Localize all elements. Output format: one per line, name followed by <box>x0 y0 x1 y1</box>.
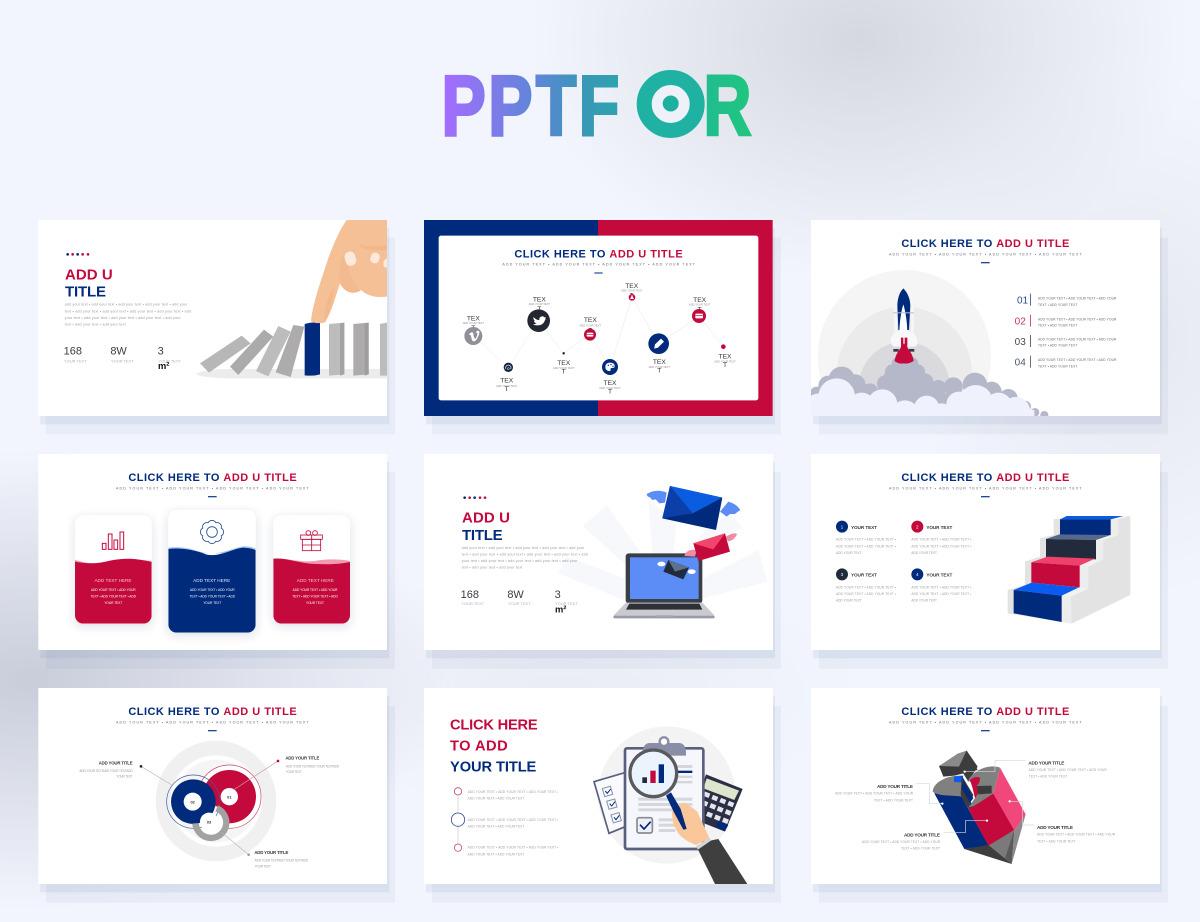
callout: top right: ADD YOUR TEXT • ADD YOUR TEXT • ADD YOUR <box>1029 768 1107 772</box>
numbered list: ADD YOUR TEXT • ADD YOUR TEXT • ADD YOUR <box>1038 337 1117 341</box>
statistics: 168 <box>64 345 82 357</box>
callout: right: YOUR TEXT <box>286 770 302 774</box>
clipboard illustration <box>594 726 747 884</box>
step 3 text <box>836 568 896 603</box>
callout: top right: TEXT • ADD YOUR TEXT <box>1029 775 1067 779</box>
callout: right <box>1008 800 1116 843</box>
body text: text • add your text • add your text <box>65 323 126 327</box>
node labels: TEX <box>604 380 617 387</box>
node labels: ADD YOUR TEXT <box>599 386 621 390</box>
heading: TO ADD <box>450 739 508 755</box>
callout: right: ADD YOUR TEXTADD YOUR TEXTADD <box>286 764 340 768</box>
node labels: T <box>505 386 509 393</box>
statistics: 3 <box>555 589 561 601</box>
title: CLICK HERE TO ADD U TITLE <box>901 472 1069 484</box>
step 4 text: ADD YOUR TEXT • ADD YOUR TEXT • <box>911 592 971 596</box>
statistics: YOUR TEXT <box>64 358 87 363</box>
step 1 text: ADD YOUR TEXT • ADD YOUR TEXT • <box>836 544 896 548</box>
card: right <box>273 515 350 624</box>
node labels: T <box>562 369 566 376</box>
node labels: T <box>608 389 612 396</box>
statistics: 168 <box>461 589 479 601</box>
timeline list: ADD YOUR TEXT • ADD YOUR TEXT • ADD YOUR TEXT • <box>468 818 558 822</box>
logo: PPTFOR: PPTFOR <box>441 59 751 154</box>
node labels: TEX <box>693 297 707 304</box>
numbered list: 03 <box>1015 337 1026 348</box>
callout: right <box>233 756 340 790</box>
heading: TITLE <box>65 284 106 301</box>
callout: left <box>835 784 943 805</box>
venn circles <box>156 741 276 861</box>
panel: clipboard slide <box>424 688 781 903</box>
step 4 text: ADD YOUR TEXT • ADD YOUR TEXT • <box>911 585 971 589</box>
numbered list: 02 <box>1015 317 1026 328</box>
numbered list: TEXT • ADD YOUR TEXT <box>1038 344 1077 348</box>
panel: stairs slide <box>811 454 1168 669</box>
step 1 text: 1 <box>841 524 844 529</box>
card: right: TEXT • ADD YOUR TEXT • ADD <box>292 594 338 598</box>
callout: top right: ADD YOUR TITLE <box>1028 761 1064 766</box>
connecting line <box>473 297 723 367</box>
icon: signal node <box>504 363 513 372</box>
step 1 text: ADD YOUR TEXT • ADD YOUR TEXT • <box>836 538 896 542</box>
card: centre: ADD YOUR TEXT • ADD YOUR <box>190 588 235 592</box>
node labels <box>463 283 736 396</box>
callout: bottom <box>222 833 309 868</box>
panel: domino slide <box>38 220 395 434</box>
node labels: T <box>698 306 702 313</box>
big blue envelope <box>647 486 740 530</box>
body text: add your text • add your text • add your text • add your text • add your <box>462 546 585 550</box>
statistics: YOUR TEXT <box>158 358 182 363</box>
timeline list <box>451 788 558 856</box>
statistics <box>64 345 182 371</box>
rocket <box>891 288 917 364</box>
icon: gear <box>200 520 224 544</box>
body text: your text • add your text • add your text • add your text • add your <box>462 559 578 563</box>
icon: flask node <box>629 294 635 301</box>
icon: archive node <box>692 309 706 323</box>
step 4 text: 4 <box>916 572 919 577</box>
icon: vimeo node <box>464 327 482 345</box>
node labels: ADD YOUR TEXT <box>621 289 643 293</box>
step 4 text <box>911 568 971 603</box>
side checklist <box>593 772 624 834</box>
heading <box>450 718 538 776</box>
venn circles: 03 <box>207 819 212 824</box>
callout: lower left: TEXT • ADD YOUR TEXT <box>901 847 940 851</box>
callout: right: ADD YOUR TEXT • ADD YOUR TEXT • ADD YOUR <box>1037 833 1116 837</box>
numbered list: ADD YOUR TEXT • ADD YOUR TEXT • ADD YOUR <box>1038 296 1117 300</box>
step 2 text: ADD YOUR TEXT • ADD YOUR TEXT • <box>911 544 971 548</box>
3D cut block <box>933 751 1026 864</box>
front smoke cloud <box>811 378 1034 416</box>
node labels: T <box>537 306 541 313</box>
venn circles: 02 <box>190 799 196 804</box>
card: centre: TEXT • ADD YOUR TEXT • ADD <box>190 594 236 598</box>
statistics: 8W <box>507 589 524 601</box>
step 3 text: YOUR TEXT <box>851 573 877 578</box>
step 1 text <box>836 521 896 555</box>
decorative dots <box>463 496 486 499</box>
title: CLICK HERE TO ADD U TITLE <box>901 706 1069 718</box>
panel: 3D block slide <box>811 688 1168 903</box>
node labels: ADD YOUR TEXT <box>496 384 518 388</box>
callout: bottom: ADD YOUR TEXTADD YOUR TEXTADD <box>255 859 309 863</box>
node labels: T <box>630 293 634 300</box>
node labels: T <box>657 368 661 375</box>
callout: left: YOUR TEXT <box>116 775 133 779</box>
subtitle: ADD YOUR TEXT • ADD YOUR TEXT • ADD YOUR TEXT • ADD YOUR TEXT <box>116 720 309 724</box>
statistics: m² <box>555 604 566 614</box>
node labels: TEX <box>533 296 546 303</box>
step 3 text: ADD YOUR TEXT • ADD YOUR TEXT • <box>836 585 896 589</box>
body text <box>462 546 588 570</box>
node labels: TEX <box>719 354 732 361</box>
icon: gift <box>301 531 322 551</box>
subtitle: ADD YOUR TEXT • ADD YOUR TEXT • ADD YOUR TEXT • ADD YOUR TEXT <box>889 720 1082 724</box>
callout: left: ADD YOUR TITLE <box>877 784 913 789</box>
title: CLICK HERE TO ADD U TITLE <box>514 249 683 261</box>
numbered list: TEXT • ADD YOUR TEXT <box>1038 365 1077 369</box>
numbered list <box>1015 294 1117 369</box>
card: left: YOUR TEXT <box>104 601 122 605</box>
body text: text • add your text • add your text <box>462 566 522 570</box>
node labels: TEX <box>653 359 666 366</box>
rocket launch illustration <box>811 270 1048 416</box>
callout: right: TEXT • ADD YOUR TEXT <box>1037 839 1076 843</box>
numbered list: TEXT • ADD YOUR TEXT <box>1038 324 1077 328</box>
step 3 text: ADD YOUR TEXT • ADD YOUR TEXT • <box>836 592 896 596</box>
numbered list: ADD YOUR TEXT • ADD YOUR TEXT • ADD YOUR <box>1038 317 1117 321</box>
numbered list: TEXT • ADD YOUR TEXT <box>1038 303 1077 307</box>
3D stairs <box>1008 516 1130 624</box>
node labels: T <box>471 325 475 332</box>
heading <box>462 510 510 544</box>
panel: three cards slide <box>38 454 395 669</box>
panel: email laptop slide <box>424 454 781 669</box>
step 2 text <box>911 521 971 555</box>
panel: circles slide <box>38 688 395 903</box>
small dark envelope <box>657 560 696 579</box>
node labels: ADD YOUR TEXT <box>649 365 670 369</box>
numbered list: 04 <box>1015 358 1026 369</box>
body text: add your text • add your text • add your text • add your text • add your <box>65 303 188 307</box>
node labels: TEX <box>500 377 514 384</box>
panel: social timeline slide <box>424 220 781 434</box>
statistics: 8W <box>110 345 127 357</box>
red envelope <box>684 533 737 561</box>
callout: left: ADD YOUR TEXTADD YOUR TEXTADD <box>79 769 133 773</box>
node labels: ADD YOUR TEXT <box>463 321 484 325</box>
card: left <box>75 515 152 624</box>
back smoke cloud <box>811 358 1048 416</box>
card: centre: YOUR TEXT <box>203 601 221 605</box>
panel: rocket slide <box>804 220 1168 443</box>
clipboard board <box>625 737 703 849</box>
card: right: YOUR TEXT <box>306 601 324 605</box>
heading: CLICK HERE <box>450 718 538 734</box>
callout: bottom: YOUR TEXT <box>255 864 271 868</box>
icon: palette node <box>602 359 618 375</box>
node labels: ADD YOUR TEXT <box>529 302 550 306</box>
step 2 text: ADD YOUR TEXT • ADD YOUR TEXT • <box>911 538 971 542</box>
callout: left: ADD YOUR TEXT • ADD YOUR TEXT • ADD YOUR <box>835 792 914 796</box>
node labels: TEX <box>467 315 480 322</box>
hand with magnifier <box>630 750 747 884</box>
body text: text • add your text • add your text • add your text • add your text • add <box>462 553 588 557</box>
subtitle: ADD YOUR TEXT • ADD YOUR TEXT • ADD YOUR TEXT • ADD YOUR TEXT <box>116 486 309 490</box>
step 1 text: YOUR TEXT <box>851 525 877 530</box>
statistics: YOUR TEXT <box>555 601 578 606</box>
card: centre: ADD TEXT HERE <box>193 578 230 583</box>
icon: card node <box>584 329 596 341</box>
step 3 text: 3 <box>841 572 844 577</box>
statistics: YOUR TEXT <box>508 601 531 606</box>
decorative dots <box>66 253 89 256</box>
title: CLICK HERE TO ADD U TITLE <box>901 238 1069 250</box>
node labels: ADD YOUR TEXT <box>714 359 736 363</box>
calculator <box>704 774 743 832</box>
step 4 text: ADD YOUR TEXT <box>911 599 937 603</box>
callout: right: ADD YOUR TITLE <box>285 756 319 761</box>
heading <box>65 266 113 301</box>
card: left: ADD TEXT HERE <box>94 578 132 583</box>
node labels: ADD YOUR TEXT <box>553 366 575 370</box>
icon: pencil node <box>648 333 669 354</box>
timeline list: ADD YOUR TEXT • ADD YOUR TEXT <box>468 825 524 829</box>
subtitle: ADD YOUR TEXT • ADD YOUR TEXT • ADD YOUR TEXT • ADD YOUR TEXT <box>889 486 1082 490</box>
node labels: TEX <box>625 283 639 290</box>
step 2 text: 2 <box>916 524 919 529</box>
icon: twitter node <box>527 309 550 332</box>
heading: ADD U <box>462 510 510 527</box>
step 1 text: ADD YOUR TEXT <box>836 551 862 555</box>
subtitle: ADD YOUR TEXT • ADD YOUR TEXT • ADD YOUR TEXT • ADD YOUR TEXT <box>889 252 1082 256</box>
numbered list: 01 <box>1017 295 1029 306</box>
card: left: TEXT • ADD YOUR TEXT • ADD <box>91 594 137 598</box>
timeline list: ADD YOUR TEXT • ADD YOUR TEXT <box>468 797 524 801</box>
statistics <box>461 589 578 614</box>
subtitle: ADD YOUR TEXT • ADD YOUR TEXT • ADD YOUR TEXT • ADD YOUR TEXT <box>502 263 696 267</box>
callout: right: ADD YOUR TITLE <box>1037 825 1073 830</box>
step 2 text: ADD YOUR TEXT <box>911 551 937 555</box>
body text <box>65 303 191 327</box>
title: CLICK HERE TO ADD U TITLE <box>128 472 297 484</box>
callout: left: TEXT • ADD YOUR TEXT <box>874 798 913 802</box>
statistics: YOUR TEXT <box>111 358 134 363</box>
heading: ADD U <box>65 266 113 283</box>
card: left: ADD YOUR TEXT • ADD YOUR <box>91 588 136 592</box>
step 4 text: YOUR TEXT <box>926 573 952 578</box>
node labels: T <box>588 328 592 335</box>
step 3 text: ADD YOUR TEXT <box>836 599 862 603</box>
callout: left <box>79 760 173 786</box>
body text: text • add your text • add your text • add your text • add your text • add <box>65 309 191 313</box>
heading: TITLE <box>462 527 503 544</box>
laptop <box>613 553 715 618</box>
node dot <box>562 352 565 354</box>
body text: your text • add your text • add your text • add your text • add your <box>65 316 181 320</box>
callout: bottom: ADD YOUR TITLE <box>254 850 288 855</box>
title: CLICK HERE TO ADD U TITLE <box>128 706 297 718</box>
light rays <box>558 500 768 600</box>
callout: lower left <box>862 819 988 851</box>
node labels: ADD YOUR TEXT <box>580 324 601 328</box>
callout: top right <box>963 760 1107 779</box>
node labels: TEX <box>557 360 571 367</box>
numbered list: ADD YOUR TEXT • ADD YOUR TEXT • ADD YOUR <box>1038 358 1117 362</box>
node labels: T <box>723 362 727 369</box>
statistics: YOUR TEXT <box>461 601 485 606</box>
card: centre <box>168 510 256 633</box>
callout: lower left: ADD YOUR TEXT • ADD YOUR TEXT • ADD YOUR <box>862 840 941 844</box>
venn circles: 01 <box>227 794 232 799</box>
node dot <box>721 344 726 349</box>
timeline list: ADD YOUR TEXT • ADD YOUR TEXT • ADD YOUR TEXT • <box>468 790 558 794</box>
timeline list: ADD YOUR TEXT • ADD YOUR TEXT <box>468 852 524 856</box>
step 2 text: YOUR TEXT <box>926 525 952 530</box>
icon: bar chart <box>102 532 124 549</box>
heading: YOUR TITLE <box>450 760 537 776</box>
hand pushing domino <box>311 220 387 323</box>
node labels: TEX <box>584 317 597 324</box>
card: right: ADD TEXT HERE <box>297 578 334 583</box>
domino illustration <box>196 322 387 378</box>
statistics: 3 <box>158 345 164 357</box>
callout: left: ADD YOUR TITLE <box>99 760 133 765</box>
statistics: m² <box>158 361 169 371</box>
timeline list: ADD YOUR TEXT • ADD YOUR TEXT • ADD YOUR TEXT • <box>468 846 558 850</box>
card: right: ADD YOUR TEXT • ADD YOUR <box>293 588 338 592</box>
node labels: ADD YOUR TEXT <box>689 302 711 306</box>
callout: lower left: ADD YOUR TITLE <box>904 833 940 838</box>
